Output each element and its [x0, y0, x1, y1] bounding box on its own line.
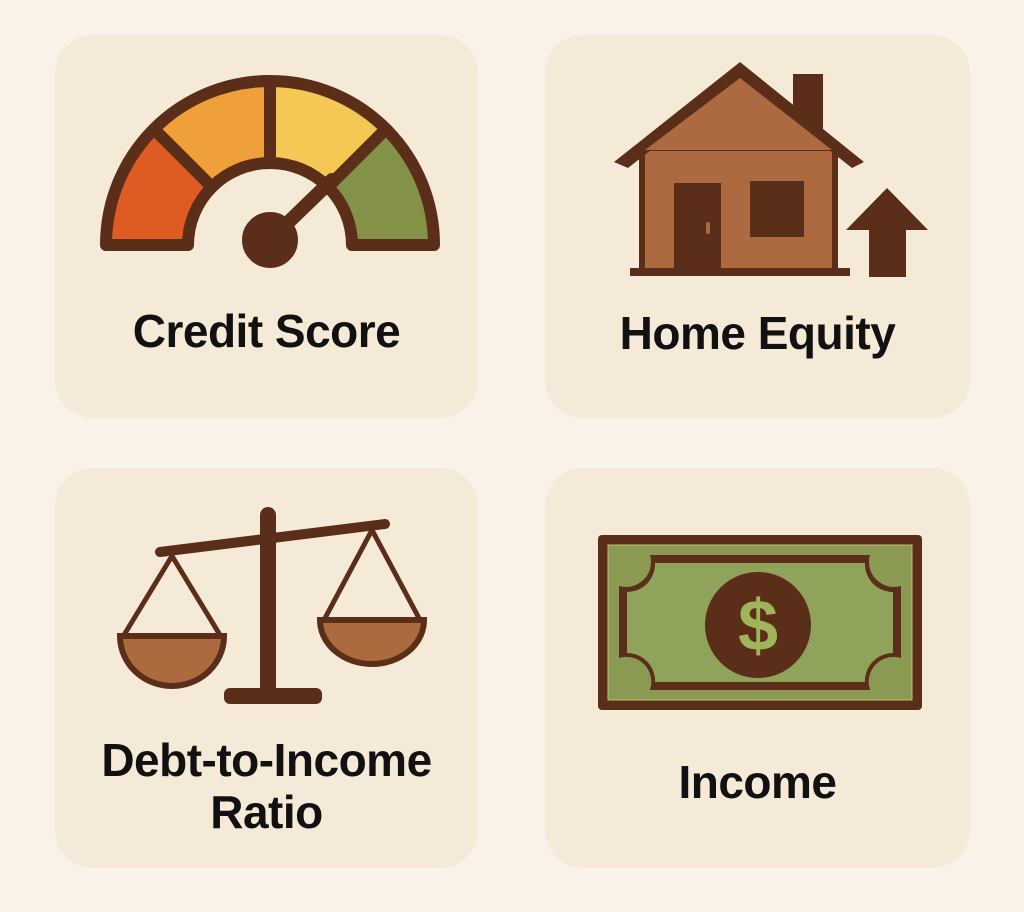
icon: house with up arrow — [614, 62, 928, 277]
icon: dollar bill — [598, 535, 922, 710]
icon: dollar bill: $ — [738, 586, 778, 666]
label: debt-to-income ratio — [101, 734, 432, 838]
panel: home equity — [545, 35, 970, 418]
label: debt-to-income ratio: Debt-to-Income — [101, 734, 432, 786]
panel: credit score — [55, 35, 478, 418]
label: credit score: Credit Score — [133, 305, 400, 357]
panel: income — [545, 468, 970, 868]
label: home equity: Home Equity — [620, 307, 895, 359]
label: debt-to-income ratio: Ratio — [210, 786, 323, 838]
icon: balance scale — [120, 515, 424, 704]
icon: gauge — [106, 81, 434, 262]
label: income: Income — [678, 756, 837, 808]
panel: debt-to-income — [55, 468, 478, 868]
